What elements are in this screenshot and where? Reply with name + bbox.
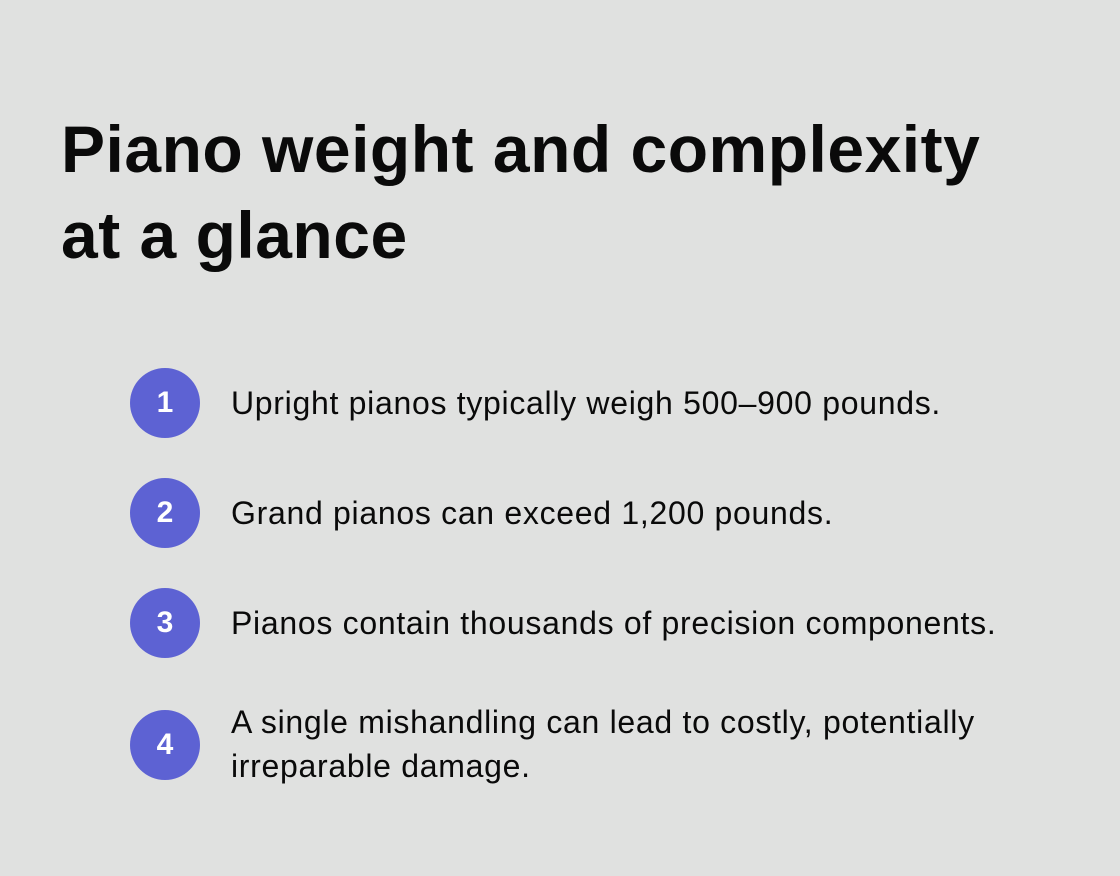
badge 4 bbox=[130, 710, 200, 780]
badge 3: 3 bbox=[157, 606, 173, 639]
text 2: Grand pianos can exceed 1,200 pounds. bbox=[231, 495, 833, 531]
text 1: Upright pianos typically weigh 500–900 pounds. bbox=[231, 385, 941, 421]
text 3: Pianos contain thousands of precision components. bbox=[231, 605, 996, 641]
badge 4: 4 bbox=[157, 728, 173, 761]
badge 3 bbox=[130, 588, 200, 658]
item 3 bbox=[130, 588, 996, 658]
badge 2: 2 bbox=[157, 496, 173, 529]
badge 1 bbox=[130, 368, 200, 438]
badge 1: 1 bbox=[157, 386, 173, 419]
title: Piano weight and complexity bbox=[61, 112, 980, 186]
title bbox=[61, 112, 980, 272]
item 2 bbox=[130, 478, 833, 548]
text 4: irreparable damage. bbox=[231, 748, 531, 784]
title: at a glance bbox=[61, 198, 408, 272]
item 4 bbox=[130, 704, 975, 784]
text 4 bbox=[231, 704, 975, 784]
item 1 bbox=[130, 368, 941, 438]
text 4: A single mishandling can lead to costly, potentially bbox=[231, 704, 975, 740]
badge 2 bbox=[130, 478, 200, 548]
